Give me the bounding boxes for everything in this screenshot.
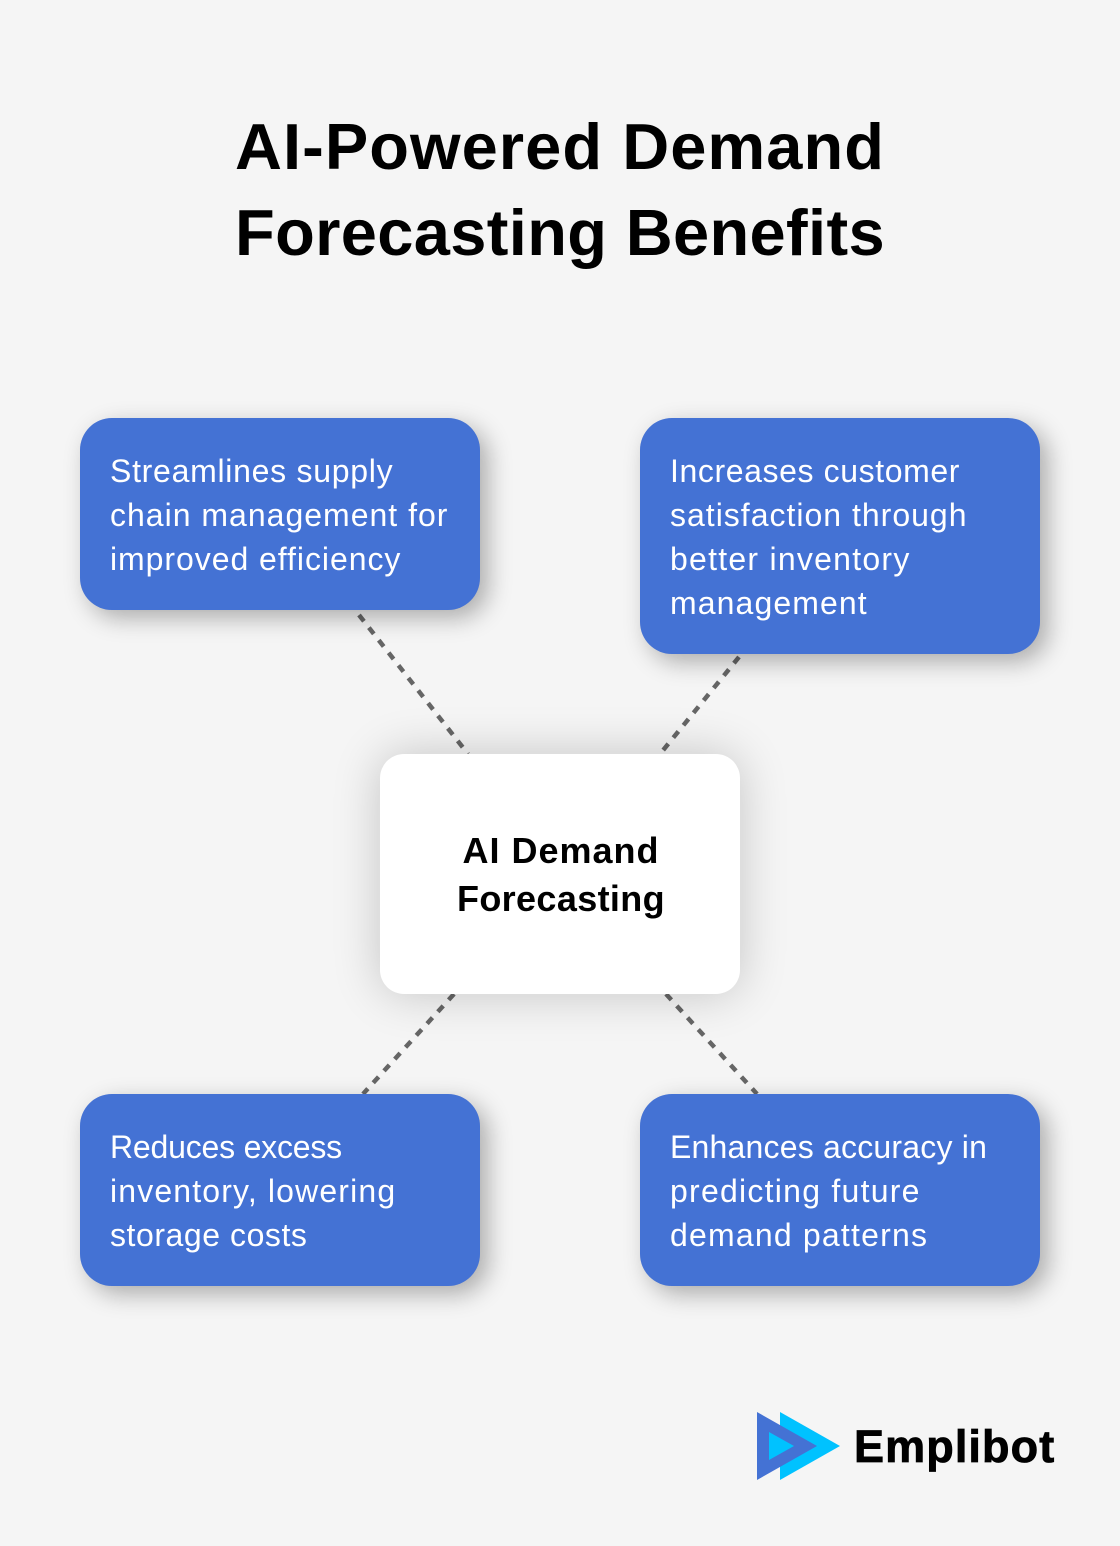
panel: supply chain benefit: improved efficiency (110, 541, 401, 577)
panel: customer satisfaction benefit (640, 418, 1040, 654)
panel: customer satisfaction benefit: management (670, 585, 868, 621)
panel: central concept: Forecasting (457, 878, 665, 919)
panel: supply chain benefit: chain management for (110, 497, 448, 533)
panel: accuracy benefit (640, 1094, 1040, 1286)
title (235, 110, 885, 269)
panel: accuracy benefit: Enhances accuracy in (670, 1129, 987, 1165)
panel: excess inventory benefit: Reduces excess (110, 1129, 342, 1165)
icon: play triangles (757, 1412, 840, 1480)
panel: accuracy benefit: demand patterns (670, 1217, 928, 1253)
title: Forecasting Benefits (235, 196, 885, 269)
panel: customer satisfaction benefit: satisfaction through (670, 497, 968, 533)
panel: customer satisfaction benefit: Increases customer (670, 453, 960, 489)
panel: excess inventory benefit: storage costs (110, 1217, 307, 1253)
logo: Emplibot (757, 1412, 1055, 1480)
panel: supply chain benefit: Streamlines supply (110, 453, 393, 489)
title: AI-Powered Demand (235, 110, 885, 183)
panel: customer satisfaction benefit: better inventory (670, 541, 911, 577)
panel: supply chain benefit (80, 418, 480, 610)
panel: excess inventory benefit (80, 1094, 480, 1286)
logo wordmark: Emplibot (854, 1421, 1055, 1472)
panel: central concept: AI Demand (462, 830, 660, 871)
panel: excess inventory benefit: inventory, lowering (110, 1173, 396, 1209)
panel: accuracy benefit: predicting future (670, 1173, 921, 1209)
panel: central concept (380, 754, 740, 994)
